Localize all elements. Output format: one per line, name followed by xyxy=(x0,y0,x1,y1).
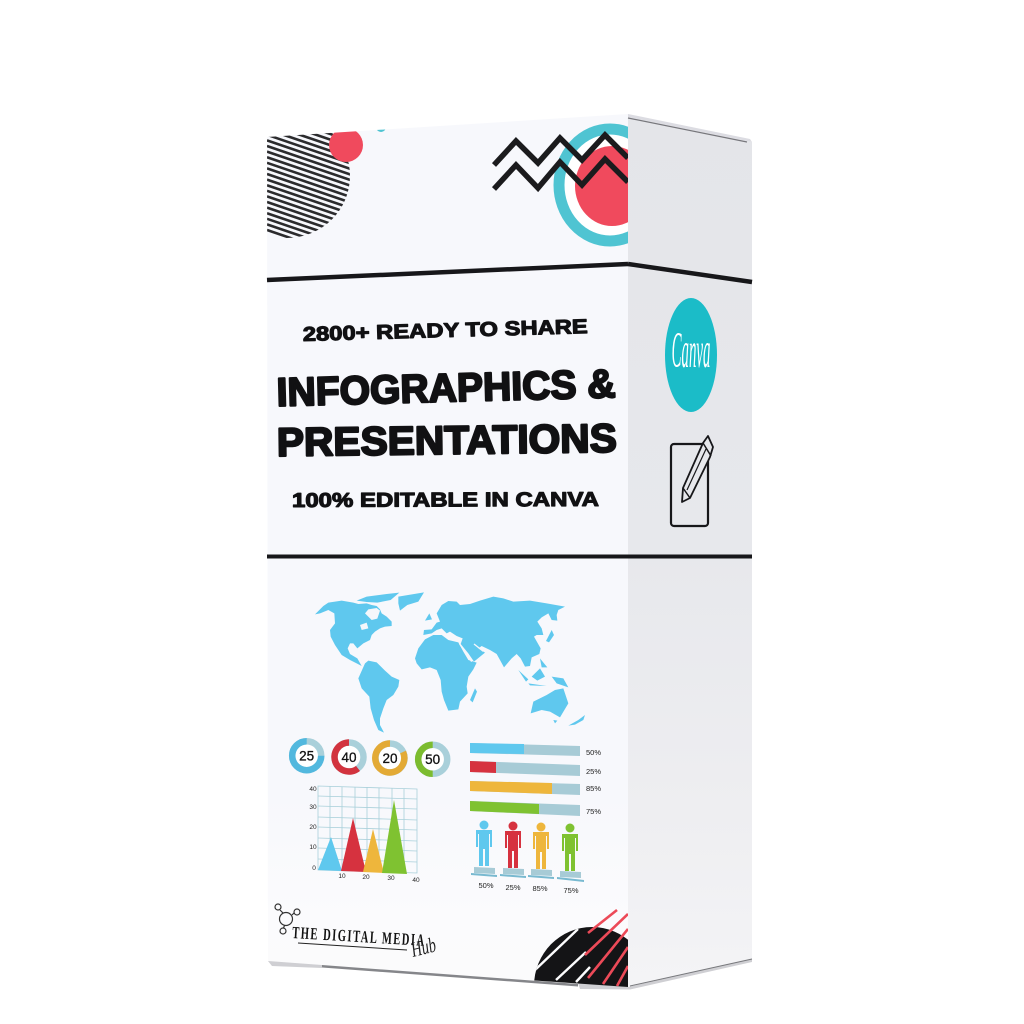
logo script: Hub xyxy=(408,933,438,962)
top black band line xyxy=(267,264,752,282)
person green 75%: 75% xyxy=(563,886,579,895)
chart axis labels: 20 xyxy=(309,824,317,831)
top front decoration xyxy=(267,124,628,246)
white stripes xyxy=(535,929,590,982)
bottom right decoration xyxy=(534,909,628,987)
donut 25: 25 xyxy=(299,748,314,764)
title line 1: INFOGRAPHICS & xyxy=(276,362,616,415)
chart axis labels xyxy=(309,786,420,884)
box bottom edge xyxy=(268,959,752,990)
red stripes xyxy=(585,910,628,986)
striped semicircle xyxy=(267,132,350,238)
chart grid xyxy=(318,786,417,873)
donut 20 xyxy=(375,743,404,772)
bar 85%: 85% xyxy=(586,784,601,793)
black semicircle xyxy=(534,927,628,987)
borneo xyxy=(532,668,545,681)
box top edge xyxy=(628,114,752,142)
icon: canva badge xyxy=(665,298,717,412)
donut 40 xyxy=(334,742,364,772)
tasmania xyxy=(553,720,557,723)
title line 2: PRESENTATIONS xyxy=(277,417,617,465)
box side face xyxy=(628,116,752,987)
brand logo xyxy=(275,904,438,962)
chart axis labels: 40 xyxy=(309,786,317,793)
new guinea xyxy=(552,677,568,687)
triangle chart xyxy=(309,786,420,884)
uk xyxy=(425,613,432,621)
bar 25%: 25% xyxy=(586,767,601,776)
north america xyxy=(315,601,392,666)
persian gulf xyxy=(474,644,483,651)
africa xyxy=(415,635,477,711)
progress bars xyxy=(470,743,601,816)
chart axis labels: 30 xyxy=(387,875,395,882)
headline text xyxy=(276,316,617,512)
person red 25%: 25% xyxy=(505,883,521,892)
bar 50%: 50% xyxy=(586,748,601,757)
red disc xyxy=(575,146,628,226)
chart axis labels: 0 xyxy=(312,865,316,872)
sumatra xyxy=(518,670,528,682)
chart triangles xyxy=(318,837,342,871)
world map xyxy=(315,592,585,733)
logo network icon xyxy=(275,904,300,934)
subtitle: ready to share: 2800+ READY TO SHARE xyxy=(303,316,588,346)
australia xyxy=(531,688,568,717)
great lakes xyxy=(360,623,368,630)
small teal dot xyxy=(377,130,386,132)
new zealand xyxy=(568,715,585,726)
donut 50 xyxy=(418,745,447,774)
subtitle: editable in canva: 100% EDITABLE IN CANVA xyxy=(292,489,599,512)
people pictograms xyxy=(471,820,584,895)
person blue 50%: 50% xyxy=(478,881,494,890)
java xyxy=(528,683,547,686)
chart axis labels: 30 xyxy=(309,804,317,811)
logo wordmark: THE DIGITAL MEDIA xyxy=(292,924,425,951)
teal ring xyxy=(554,124,628,246)
philippines xyxy=(540,658,547,667)
icon: canva badge: Canva xyxy=(672,322,710,379)
donut charts xyxy=(292,741,447,774)
greenland xyxy=(398,592,424,611)
logo underline xyxy=(298,943,407,950)
arctic islands xyxy=(357,593,399,603)
hudson bay xyxy=(365,608,380,620)
eurasia xyxy=(423,597,565,667)
box front face xyxy=(267,114,628,987)
japan xyxy=(546,630,554,642)
red sea xyxy=(459,643,472,662)
product box illustration xyxy=(266,114,752,990)
red circle xyxy=(329,128,363,162)
black zigzags xyxy=(494,135,628,189)
donut 20: 20 xyxy=(382,751,398,766)
lower black band line xyxy=(267,554,752,558)
person gold 85%: 85% xyxy=(532,884,548,893)
icon: pencil and note xyxy=(671,436,713,526)
chart axis labels: 10 xyxy=(309,844,317,851)
chart axis labels: 20 xyxy=(362,874,370,881)
bar 75%: 75% xyxy=(586,807,601,816)
chart axis labels: 10 xyxy=(338,873,346,880)
donut 50: 50 xyxy=(425,752,440,767)
madagascar xyxy=(470,688,477,702)
chart axis labels: 40 xyxy=(412,877,420,884)
donut 25 xyxy=(292,741,321,770)
donut 40: 40 xyxy=(341,750,357,765)
south america xyxy=(358,661,399,733)
